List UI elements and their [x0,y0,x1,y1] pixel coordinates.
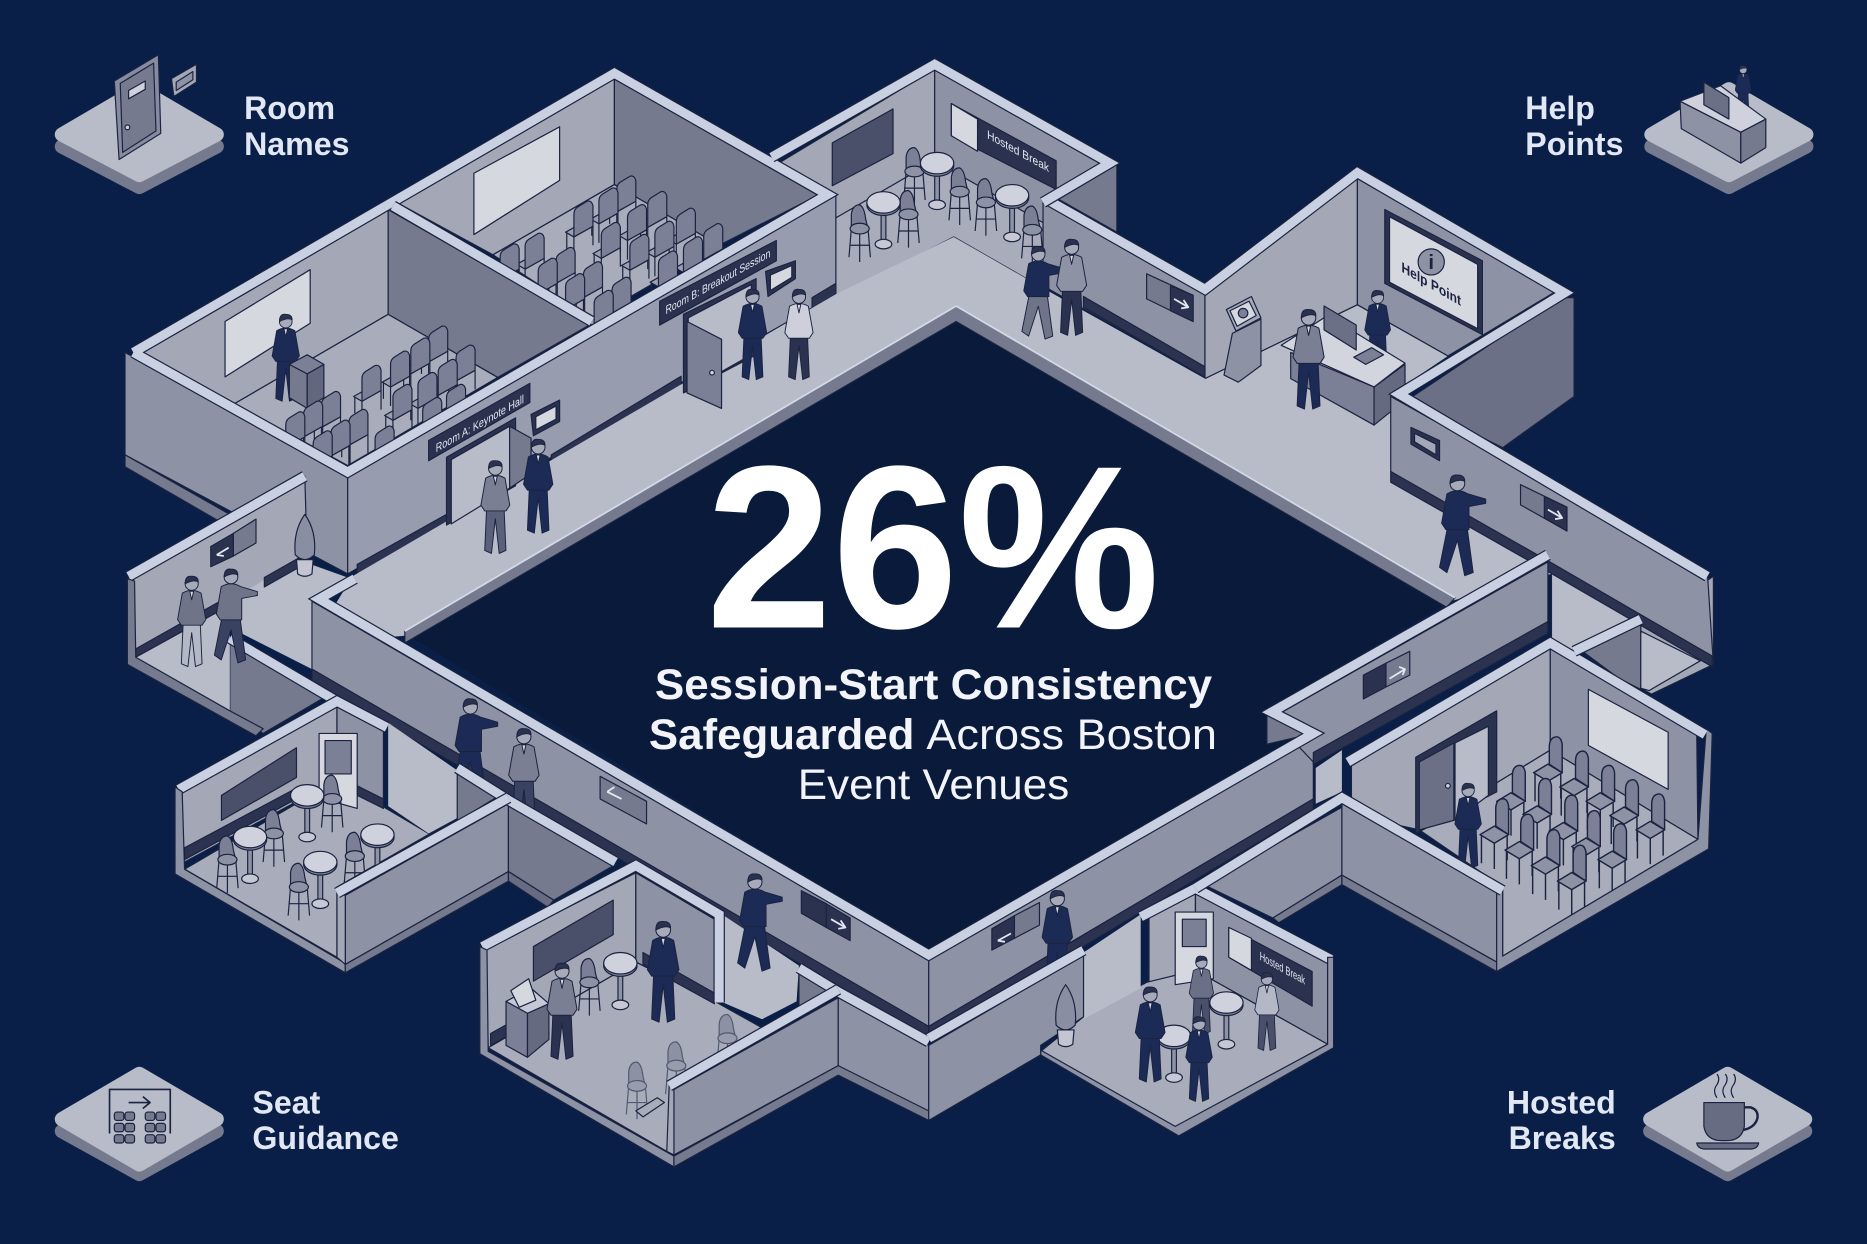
label: seat guidance: Guidance [252,1120,399,1156]
label: hosted breaks: Hosted [1507,1084,1616,1120]
panel: main corridor floor [312,64,1713,667]
door: room A [447,418,531,525]
label: room names: Room [244,90,335,126]
sign: room A keynote hall: Room A: Keynote Hall [436,392,524,455]
subtitle: Session-Start Consistency [655,661,1212,709]
label: help points: Points [1525,126,1623,162]
panel: left lower cafe room [175,638,616,973]
label: hosted breaks: Breaks [1509,1120,1616,1156]
outer left wall [125,352,348,574]
sign: hosted break: Hosted Break [987,127,1049,175]
sign: room B breakout session [660,241,776,325]
icon: coffee cup tile [1650,1074,1805,1174]
room B breakout [399,79,818,345]
panel: right lower seating room [1195,619,1712,972]
panel: top hosted break room [779,69,1117,298]
panel: room A and room B building [125,73,836,575]
sign: arrow [1147,274,1193,321]
sign: hosted break lower [1229,928,1312,1006]
subtitle: Safeguarded [649,711,914,759]
subtitle [649,661,1217,809]
corner: room names [62,55,349,187]
sign: help point [1385,210,1482,335]
icon: door tile [62,55,217,187]
plant [295,514,315,576]
corner: help points [1525,65,1806,187]
panel: right lower corner rooms [1551,560,1713,694]
panel: bottom right break room [929,888,1334,1136]
room A keynote hall [143,210,589,486]
panel: bottom left lounge room [480,866,929,1167]
door: room B [683,279,756,408]
icon: seat grid tile [62,1074,217,1174]
subtitle: Across Boston [926,711,1217,759]
people at long wall [453,699,539,826]
icon: help desk tile [1651,65,1806,187]
label: seat guidance: Seat [252,1084,320,1120]
label: help points: Help [1525,90,1595,126]
sign: room A keynote hall [429,383,530,461]
corner: hosted breaks [1507,1074,1805,1174]
sign: help point: Help Point [1401,259,1461,310]
subtitle: Event Venues [798,761,1069,809]
help desk [1281,306,1405,425]
arrow signs [600,651,1410,950]
panel: left corridor stub [127,476,348,736]
panel: help point room [1043,176,1574,482]
corridor people [178,239,1486,971]
corner: seat guidance [62,1074,399,1174]
corridor wall right [1391,396,1713,664]
sign: help point: i [1428,252,1434,274]
central diamond [405,312,1450,953]
kiosk [1224,296,1261,382]
sign: arrow right wall [1521,485,1567,531]
plaque signs [531,261,795,436]
label: room names: Names [244,126,349,162]
sign: arrow left [211,519,256,567]
door [1416,711,1497,833]
podium with laptop [506,979,549,1057]
sign: room B breakout session: Room B: Breakout Session [666,246,770,317]
sign: hosted break [951,104,1056,189]
chairs [1480,737,1665,915]
headline statistic: 26% [706,418,1160,677]
sign: hosted break lower: Hosted Break [1260,948,1305,988]
corridor wall of rooms [348,194,836,574]
sign: door plate [1411,427,1440,461]
panel: long wall facing lower left [312,555,1548,1038]
